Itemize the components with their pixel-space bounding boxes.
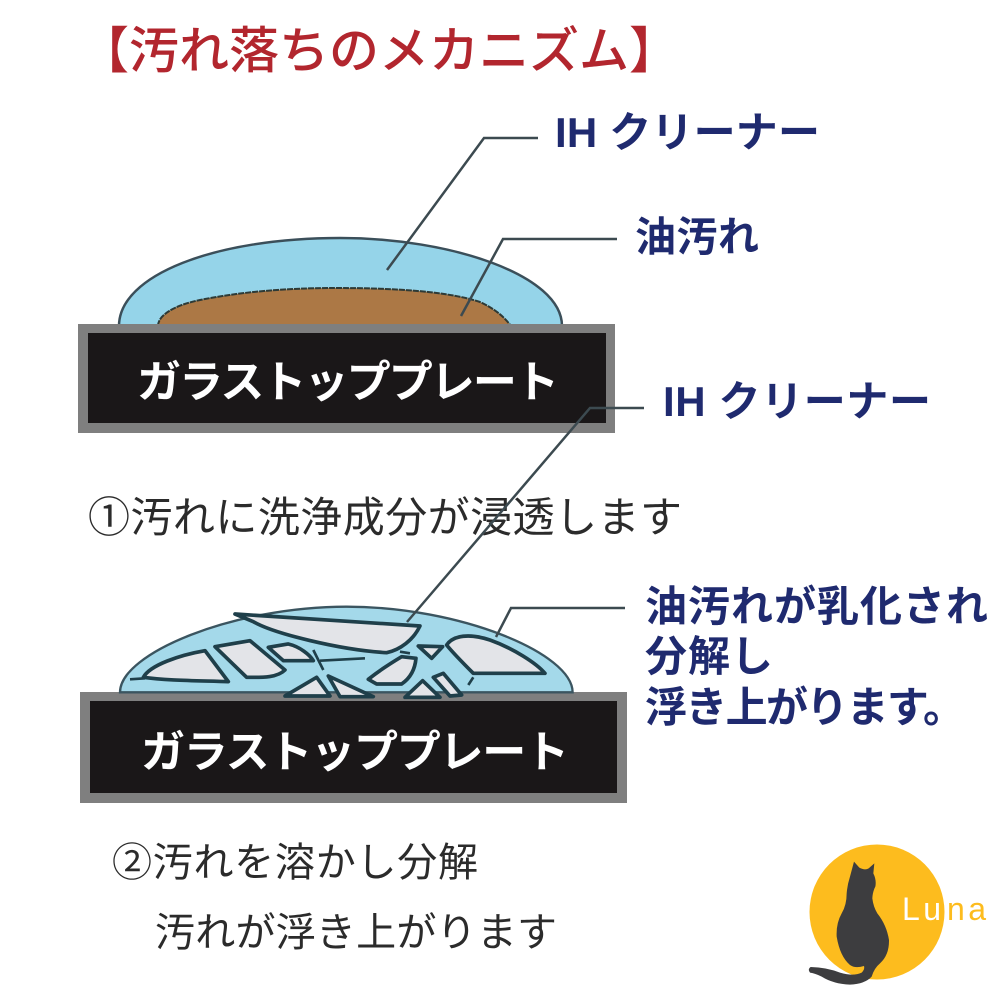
stain fragment: top (235, 614, 420, 653)
cleaner dome with broken stain (120, 607, 573, 697)
stain fragment: right centre (368, 657, 416, 684)
label: IH cleaner: IH クリーナー (555, 109, 820, 156)
stain fragment: lower right sliver (433, 673, 462, 696)
stain fragment: lower left (285, 677, 330, 696)
stain fragment: small centre (268, 644, 313, 661)
glass top plate: ガラストッププレート (137, 358, 559, 407)
diagram 1: cleaner penetrating the stain (78, 109, 820, 433)
label: emulsified stain (645, 583, 988, 731)
leader line: emulsified stain (496, 608, 625, 637)
caption 1: ①汚れに洗浄成分が浸透します (88, 494, 682, 541)
caption 2 (112, 841, 557, 955)
logo wordmark: na (947, 891, 990, 927)
caption 2: ②汚れを溶かし分解 (112, 841, 478, 885)
glass top plate: ガラストッププレート (141, 728, 569, 777)
icon: cat silhouette (809, 862, 889, 985)
title: 【汚れ落ちのメカニズム】 (79, 23, 679, 79)
caption 2: 汚れが浮き上がります (155, 911, 557, 955)
logo wordmark (902, 891, 990, 927)
leader line: cleaner (407, 408, 644, 622)
stain fragment: diamond (418, 646, 443, 658)
label: IH cleaner: IH クリーナー (663, 378, 931, 425)
glass top plate (80, 692, 627, 803)
leader line: cleaner (387, 138, 538, 270)
glass top plate (78, 324, 615, 433)
logo wordmark: Lu (902, 891, 945, 927)
oil stain (158, 288, 511, 326)
diagram 2: stain dissolving (80, 378, 988, 803)
stain fragment: far left (143, 651, 228, 682)
label: emulsified stain: 油汚れが乳化され (645, 583, 988, 630)
logo moon (810, 844, 944, 980)
cleaner dome (119, 238, 562, 326)
logo: Luna (809, 844, 990, 985)
stain fragment: lower centre (328, 676, 373, 697)
stain fragment: right large (447, 636, 545, 673)
label: emulsified stain: 浮き上がります。 (645, 684, 965, 731)
label: emulsified stain: 分解し (645, 633, 773, 680)
label: oil stain: 油汚れ (635, 214, 759, 260)
stain fragment: left middle (215, 641, 285, 677)
stain fragment: lower right (405, 681, 440, 697)
leader line: oil stain (461, 239, 617, 316)
